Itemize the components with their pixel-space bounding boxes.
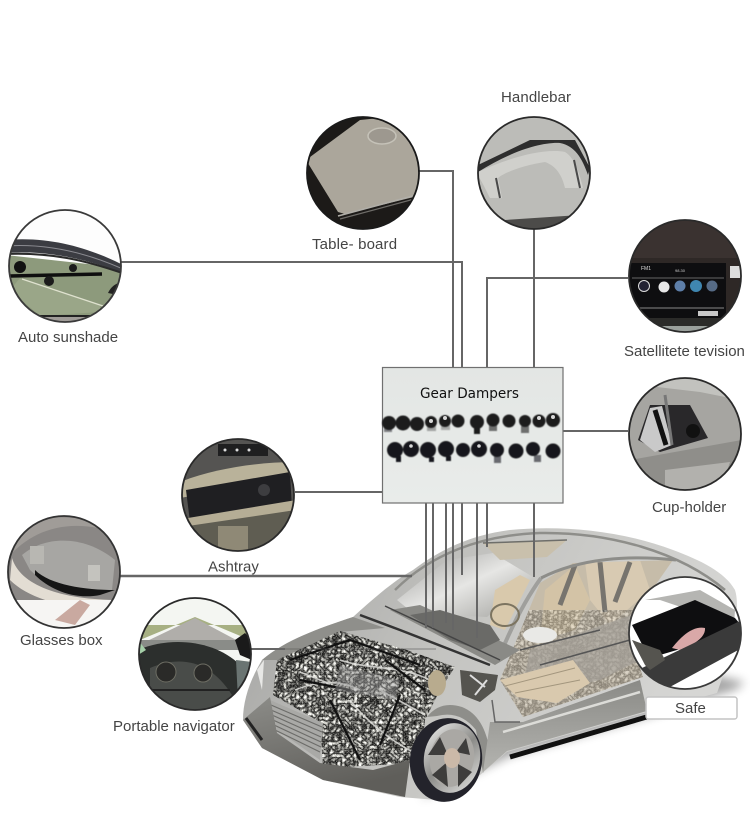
label: safe: Safe xyxy=(675,700,706,717)
icon: satellite television photo: 98.30 xyxy=(675,268,686,273)
sill xyxy=(483,680,647,772)
sunroof xyxy=(483,540,567,560)
front seat beyond windshield xyxy=(490,575,530,630)
icon: safe photo xyxy=(628,576,745,690)
connector lines xyxy=(120,171,628,649)
front seat cushion xyxy=(500,660,590,703)
label: table board: Table- board xyxy=(312,236,397,253)
strut and brake booster xyxy=(428,670,446,696)
label: auto sunshade: Auto sunshade xyxy=(18,329,118,346)
icon: table board photo xyxy=(305,115,423,233)
damper row 1 xyxy=(382,413,560,434)
label: satellite television: Satellitete tevision xyxy=(624,343,745,360)
damper row 2 xyxy=(387,441,560,463)
engine bay xyxy=(273,631,455,767)
heading: gear dampers: Gear Dampers xyxy=(420,386,519,402)
roof rail shade xyxy=(395,533,725,590)
car body silhouette xyxy=(243,528,737,800)
label: ashtray: Ashtray xyxy=(208,558,259,576)
icon: auto sunshade photo xyxy=(8,209,122,323)
icon: handlebar photo xyxy=(476,115,592,235)
icon: glasses box photo xyxy=(6,514,122,632)
icon: ashtray photo xyxy=(180,438,296,556)
label: portable navigator: Portable navigator xyxy=(113,718,235,735)
icon: portable navigator photo xyxy=(138,597,252,715)
panel: gear dampers xyxy=(382,368,563,503)
front fender xyxy=(427,705,490,773)
label: cup holder: Cup-holder xyxy=(652,499,726,516)
label: glasses box: Glasses box xyxy=(20,632,103,649)
hub and firewall parts xyxy=(460,670,498,702)
icon: cup holder photo xyxy=(627,376,743,492)
side mirror xyxy=(523,627,557,643)
windshield xyxy=(397,553,533,617)
hood xyxy=(262,617,385,660)
headlight xyxy=(257,660,264,690)
ground shadow xyxy=(420,672,745,800)
front bumper xyxy=(243,697,410,797)
cabin interior xyxy=(500,560,673,717)
icon: satellite television photo xyxy=(627,218,744,334)
steering wheel xyxy=(491,604,519,626)
car cutaway illustration xyxy=(243,528,745,808)
screen text: FM1 xyxy=(641,266,651,272)
A pillar xyxy=(497,578,541,662)
radiator xyxy=(270,700,323,760)
label: handlebar: Handlebar xyxy=(501,89,571,106)
front wheel xyxy=(403,712,489,808)
dash and cowl xyxy=(390,605,520,665)
label: safe xyxy=(646,697,737,719)
